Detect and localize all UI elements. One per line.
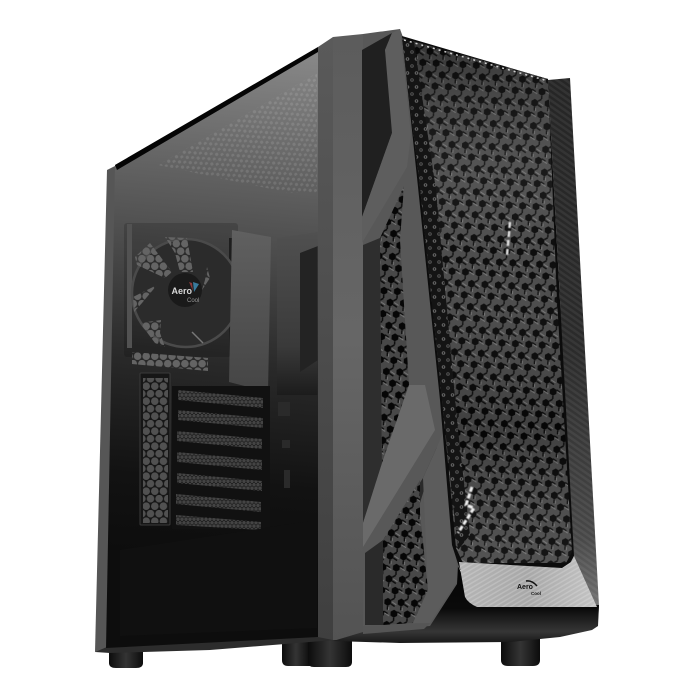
rear hex vent column <box>140 373 170 525</box>
fan logo wing <box>189 282 199 292</box>
base lip <box>363 623 430 634</box>
expansion slot shadow <box>172 386 270 450</box>
dense inner left edge <box>402 38 470 550</box>
black base <box>333 566 599 643</box>
panel: front mesh <box>402 36 574 570</box>
fan: AeroCool <box>132 237 240 347</box>
mesh backing <box>402 36 574 570</box>
highlight: brand glint <box>507 222 510 255</box>
highlight: lower left glint <box>458 487 474 533</box>
top black edge <box>115 47 318 170</box>
PCI expansion slots <box>176 390 263 530</box>
white dotted top edge <box>404 40 548 81</box>
feet <box>109 636 540 668</box>
silver carbon plate <box>459 556 597 607</box>
glass tint <box>106 47 318 648</box>
mesh shading <box>402 38 572 563</box>
bright rear plate <box>229 230 271 392</box>
front logo: Cool <box>531 591 541 596</box>
lower side mesh <box>383 480 428 625</box>
fan: AeroCool: Cool <box>187 298 199 304</box>
front logo <box>517 581 541 596</box>
side frame: left strip <box>95 165 117 652</box>
interior seen through the glass <box>124 74 318 530</box>
frame body <box>363 29 460 632</box>
lower grey column <box>413 430 458 623</box>
fan logo text: Aero <box>172 286 193 296</box>
mesh base <box>402 38 572 563</box>
fan blade gaps with hex grille <box>133 237 210 347</box>
foot: rear right <box>282 636 310 666</box>
fan hub <box>168 273 202 307</box>
panel: tempered glass side <box>95 47 335 653</box>
drive bracket <box>277 232 318 395</box>
strip beside glass <box>318 37 333 640</box>
foot: front left <box>308 640 352 667</box>
upper side mesh <box>380 186 409 463</box>
panel: carbon side strip <box>548 78 599 620</box>
foot: front right <box>501 636 540 666</box>
fan frame <box>124 223 238 357</box>
rear ports <box>278 402 290 488</box>
foot: rear left <box>109 648 143 668</box>
panel: front base <box>333 556 599 643</box>
top vent perforation <box>158 73 317 193</box>
middle diagonal band <box>363 385 435 547</box>
panel: front frame <box>318 29 460 640</box>
dark channel <box>363 238 382 523</box>
illustration: PC tower case <box>95 29 599 668</box>
hex row below fan <box>132 352 208 371</box>
front logo: Aero <box>517 584 533 591</box>
upper diagonal facet <box>362 29 411 243</box>
bottom lip <box>95 636 335 653</box>
pillar <box>333 34 363 640</box>
upper dark wedge <box>362 33 392 217</box>
PSU shroud <box>254 528 261 530</box>
lower dark wedge <box>365 447 437 625</box>
